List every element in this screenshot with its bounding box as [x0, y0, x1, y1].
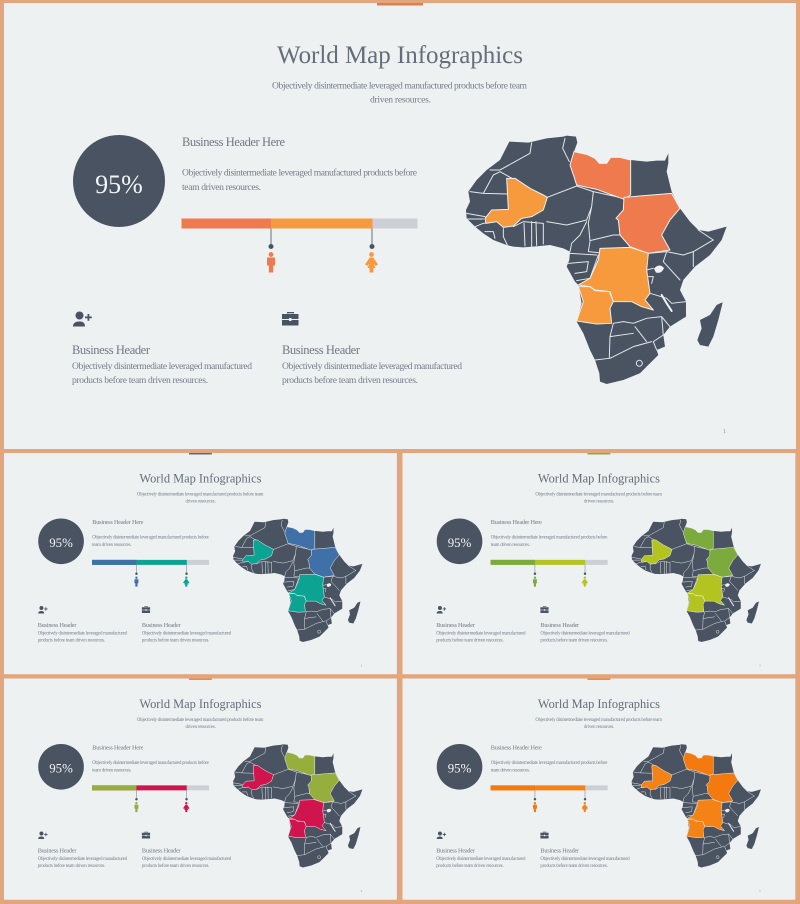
map: Africa: [233, 519, 362, 642]
column: briefcase: [540, 606, 630, 643]
progress bar: [491, 785, 608, 790]
column: add user: Business Header: [436, 622, 475, 629]
percentage circle: [437, 518, 482, 564]
percentage circle: 95%: [49, 762, 73, 776]
title: World Map Infographics: [538, 471, 660, 485]
subtitle: Objectively disintermediate leveraged manufactured products before team: [137, 718, 264, 723]
percentage circle: [38, 518, 84, 564]
column: briefcase: products before team driven resources.: [282, 375, 418, 386]
panel: green and lime slide: [402, 453, 795, 674]
panel: olive and crimson slide: [4, 678, 397, 900]
page number: 5: [759, 889, 761, 893]
percentage circle: 95%: [448, 762, 472, 776]
business header block: [92, 744, 209, 773]
map: Africa: [466, 136, 727, 384]
marker: male: [134, 790, 138, 812]
column: add user: [436, 606, 526, 643]
page number: 1: [723, 429, 726, 435]
subtitle: driven resources.: [584, 499, 614, 504]
column: briefcase: [282, 312, 462, 386]
percentage circle: [73, 135, 165, 227]
subtitle: Objectively disintermediate leveraged manufactured products before team: [272, 80, 528, 92]
column: add user: products before team driven resources.: [72, 375, 208, 386]
marker: female: [582, 565, 588, 587]
marker: male: [134, 565, 138, 587]
percentage circle: 95%: [448, 536, 472, 550]
business header block: Objectively disintermediate leveraged manufactured products before: [92, 761, 209, 766]
business header block: Business Header Here: [491, 519, 542, 526]
column: briefcase: Business Header: [540, 848, 579, 855]
column: briefcase: Business Header: [282, 343, 361, 357]
business header block: team driven resources.: [491, 543, 530, 548]
business header block: Business Header Here: [491, 744, 542, 751]
title: World Map Infographics: [139, 697, 262, 711]
column: briefcase: Objectively disintermediate leveraged manufactured: [540, 632, 630, 637]
marker: female: [365, 228, 378, 272]
tab marker: [377, 3, 423, 6]
subtitle: driven resources.: [370, 94, 431, 106]
tab marker: [189, 678, 212, 680]
tab marker: [189, 453, 212, 454]
business header block: Business Header Here: [92, 744, 144, 751]
column: briefcase: Objectively disintermediate leveraged manufactured: [142, 632, 232, 637]
marker: male: [267, 228, 275, 272]
column: briefcase: Objectively disintermediate leveraged manufactured: [282, 361, 462, 372]
column: briefcase: products before team driven resources.: [540, 864, 608, 869]
progress bar: [92, 560, 209, 565]
column: add user: Business Header: [436, 848, 475, 855]
tab marker: [588, 453, 610, 454]
column: add user: products before team driven resources.: [38, 638, 105, 643]
column: briefcase: Objectively disintermediate leveraged manufactured: [142, 857, 232, 862]
column: add user: products before team driven resources.: [436, 864, 504, 869]
column: add user: [38, 832, 128, 869]
business header block: [491, 744, 607, 773]
title: World Map Infographics: [139, 471, 262, 485]
page number: 4: [361, 889, 363, 893]
column: add user: Objectively disintermediate leveraged manufactured: [72, 361, 252, 372]
percentage circle: 95%: [49, 536, 73, 550]
business header block: team driven resources.: [92, 768, 131, 773]
column: briefcase: Business Header: [142, 622, 181, 629]
column: add user: products before team driven resources.: [436, 638, 504, 643]
column: add user: products before team driven resources.: [38, 864, 105, 869]
business header block: Business Header Here: [182, 135, 285, 149]
column: add user: Objectively disintermediate leveraged manufactured: [436, 632, 526, 637]
column: briefcase: [142, 832, 232, 869]
panel: blue and teal slide: [4, 453, 397, 674]
progress bar: [92, 785, 209, 790]
column: add user: [72, 312, 252, 386]
column: add user: Objectively disintermediate leveraged manufactured: [38, 632, 128, 637]
map: Africa: [233, 744, 362, 867]
subtitle: driven resources.: [186, 725, 216, 730]
progress bar: [182, 218, 418, 228]
column: briefcase: products before team driven resources.: [142, 638, 209, 643]
subtitle: Objectively disintermediate leveraged manufactured products before team: [535, 492, 662, 497]
percentage circle: [38, 744, 84, 790]
percentage circle: 95%: [95, 170, 143, 199]
column: briefcase: Objectively disintermediate leveraged manufactured: [540, 857, 630, 862]
business header block: team driven resources.: [92, 543, 131, 548]
percentage circle: [437, 744, 482, 790]
column: add user: [38, 606, 128, 643]
page number: 3: [759, 663, 761, 667]
column: add user: Objectively disintermediate leveraged manufactured: [38, 857, 128, 862]
business header block: Objectively disintermediate leveraged manufactured products before: [182, 168, 417, 178]
marker: female: [582, 790, 588, 812]
map: Africa: [632, 519, 761, 642]
progress bar: [491, 560, 608, 565]
marker: female: [183, 565, 190, 587]
business header block: team driven resources.: [491, 768, 530, 773]
business header block: Objectively disintermediate leveraged manufactured products before: [491, 536, 607, 541]
column: briefcase: products before team driven resources.: [142, 864, 209, 869]
tab marker: [588, 678, 610, 680]
panel: bright orange slide: [402, 678, 795, 900]
column: briefcase: Business Header: [142, 848, 181, 855]
business header block: Objectively disintermediate leveraged manufactured products before: [92, 536, 209, 541]
page number: 2: [361, 663, 363, 667]
subtitle: Objectively disintermediate leveraged manufactured products before team: [535, 718, 662, 723]
business header block: Objectively disintermediate leveraged manufactured products before: [491, 761, 607, 766]
column: add user: Business Header: [72, 343, 151, 357]
marker: female: [183, 790, 190, 812]
panel: main slide, orange theme: [4, 3, 796, 449]
title: World Map Infographics: [538, 697, 660, 711]
subtitle: [535, 718, 662, 730]
subtitle: [137, 492, 264, 504]
column: add user: [436, 832, 526, 869]
subtitle: [535, 492, 662, 504]
title: World Map Infographics: [277, 42, 523, 69]
business header block: [491, 519, 607, 548]
subtitle: driven resources.: [186, 499, 216, 504]
column: briefcase: products before team driven resources.: [540, 638, 608, 643]
column: add user: Business Header: [38, 622, 76, 629]
subtitle: [137, 718, 264, 730]
subtitle: Objectively disintermediate leveraged manufactured products before team: [137, 492, 264, 497]
business header block: [92, 519, 209, 548]
marker: male: [533, 565, 537, 587]
business header block: team driven resources.: [182, 182, 261, 193]
column: briefcase: [540, 832, 630, 869]
column: briefcase: Business Header: [540, 622, 579, 629]
business header block: Business Header Here: [92, 519, 144, 526]
column: briefcase: [142, 606, 232, 643]
subtitle: [272, 80, 528, 106]
subtitle: driven resources.: [584, 725, 614, 730]
marker: male: [533, 790, 537, 812]
business header block: [182, 135, 417, 193]
column: add user: Objectively disintermediate leveraged manufactured: [436, 857, 526, 862]
map: Africa: [632, 744, 761, 867]
column: add user: Business Header: [38, 848, 76, 855]
